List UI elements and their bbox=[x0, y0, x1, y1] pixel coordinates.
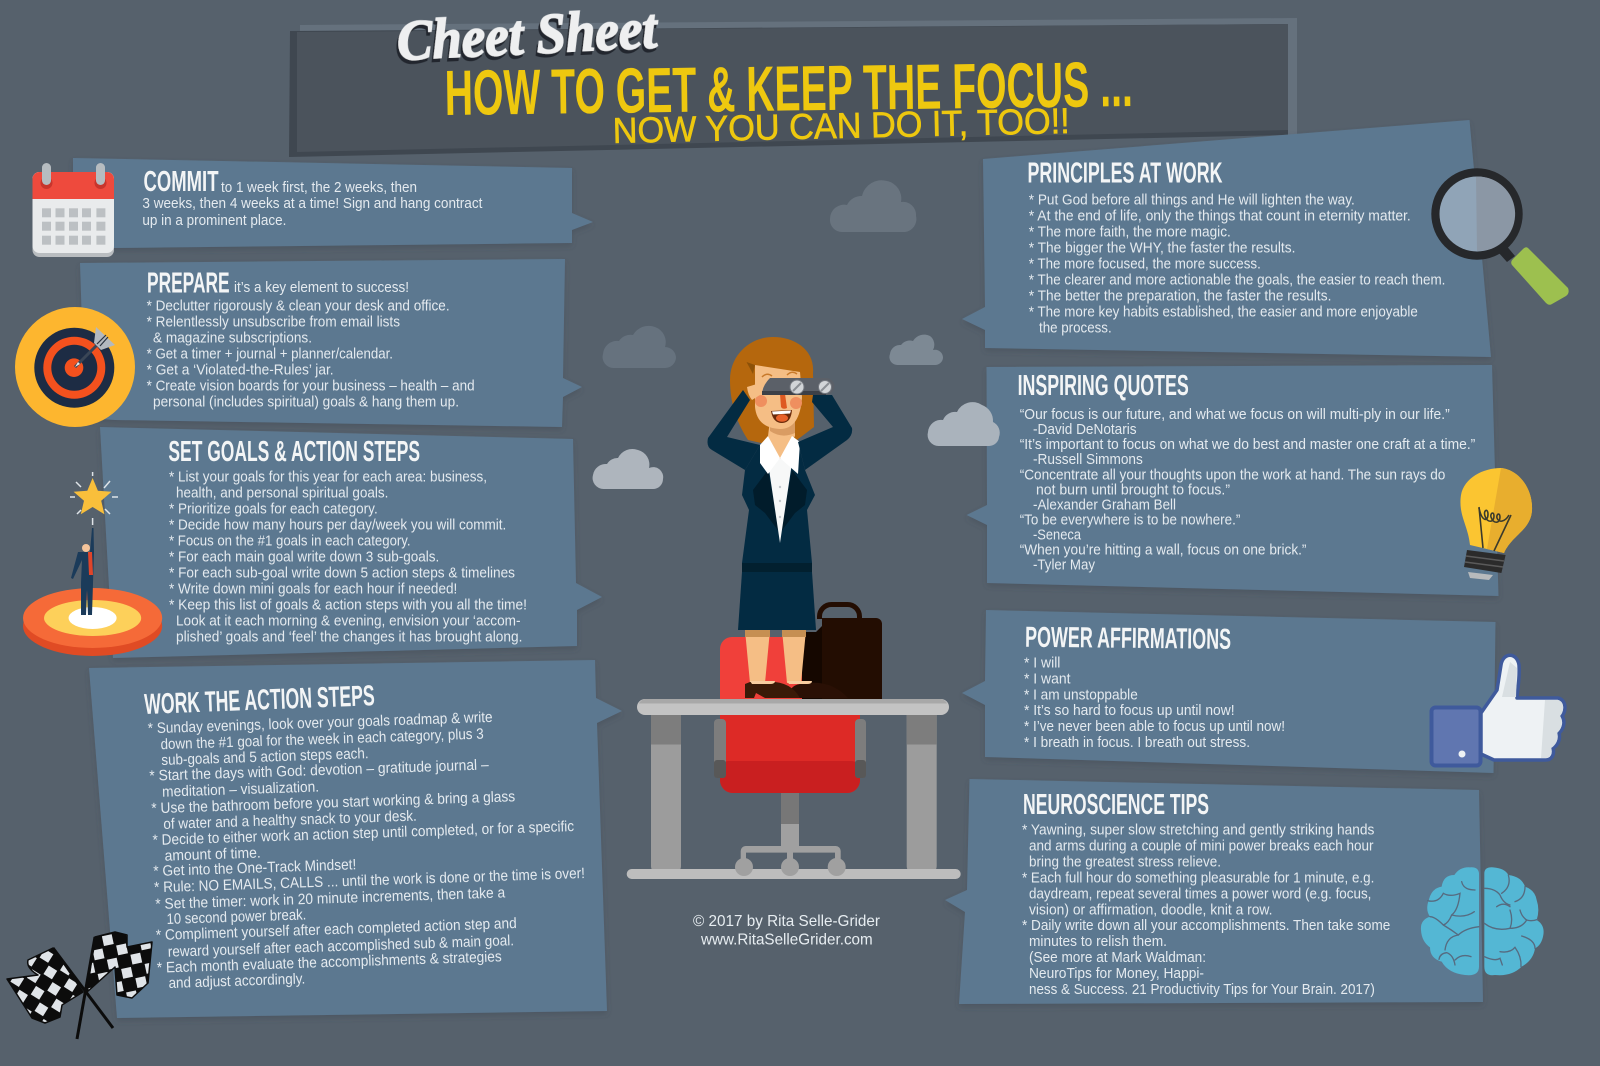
text: set goals: * For each main goal write down 3 sub-goals. bbox=[169, 549, 439, 566]
text: affirmations bbox=[1024, 655, 1285, 751]
text: work: amount of time. bbox=[164, 845, 261, 865]
panel: commit bbox=[73, 158, 593, 248]
hand bbox=[747, 380, 770, 400]
heading: affirmations: POWER AFFIRMATIONS bbox=[1025, 622, 1231, 656]
text: quotes: “It’s important to focus on what we do best and master one craft at a time.” bbox=[1020, 436, 1475, 453]
text: affirmations: * I will bbox=[1024, 655, 1060, 672]
cheeks, nose, eyes, mouth bbox=[755, 372, 802, 423]
icon: thumbs up bbox=[1432, 655, 1565, 766]
text: principles: * The clearer and more actionable the goals, the easier to reach them. bbox=[1029, 271, 1445, 288]
text: principles: * The more faith, the more magic. bbox=[1029, 223, 1231, 240]
text: work bbox=[147, 709, 585, 992]
lapels bbox=[753, 470, 780, 533]
panel shape: quotes bbox=[967, 365, 1498, 596]
panel: principles at work bbox=[962, 120, 1491, 357]
panel shape: work bbox=[89, 660, 622, 1018]
text: principles: * The more key habits established, the easier and more enjoyable bbox=[1029, 303, 1418, 320]
text: quotes: -Alexander Graham Bell bbox=[1033, 496, 1176, 513]
panel shape: principles bbox=[962, 120, 1491, 357]
text: principles bbox=[1029, 191, 1445, 336]
icon: brain bbox=[1421, 867, 1544, 975]
icon: man reaching for star on platform bbox=[23, 472, 162, 656]
text: affirmations: * I am unstoppable bbox=[1024, 686, 1138, 703]
text: work: * Each month evaluate the accomplishments & strategies bbox=[157, 948, 502, 977]
text: quotes: -Tyler May bbox=[1033, 556, 1095, 573]
text: affirmations: * It’s so hard to focus up until now! bbox=[1024, 702, 1235, 719]
text: set goals: * For each sub-goal write down 5 action steps & timelines bbox=[169, 565, 515, 582]
panel: work the action steps bbox=[89, 660, 622, 1018]
text: principles: * The bigger the WHY, the faster the results. bbox=[1029, 239, 1295, 256]
arms bbox=[708, 390, 852, 470]
text: prepare: * Get a ‘Violated-the-Rules’ jar. bbox=[147, 361, 334, 378]
panel: power affirmations bbox=[962, 610, 1496, 773]
text: quotes: “Our focus is our future, and what we focus on will multi-ply in our life.” bbox=[1020, 406, 1450, 423]
face bbox=[755, 365, 802, 429]
icon: light bulb bbox=[1460, 468, 1532, 580]
heading: neuroscience: NEUROSCIENCE TIPS bbox=[1023, 789, 1209, 821]
briefcase bbox=[802, 604, 882, 699]
chair base bbox=[735, 846, 846, 876]
copyright credit: © 2017 by Rita Selle-Grider bbox=[693, 913, 881, 930]
text: set goals: Look at it each morning & evening, envision your ‘accom- bbox=[176, 613, 521, 630]
heading: commit: COMMIT bbox=[144, 166, 219, 198]
heading: work: WORK THE ACTION STEPS bbox=[144, 680, 375, 721]
text: quotes: not burn until brought to focus.” bbox=[1036, 481, 1230, 498]
jacket bbox=[742, 442, 815, 563]
text: affirmations: * I’ve never been able to focus up until now! bbox=[1024, 718, 1285, 735]
text: neuroscience: (See more at Mark Waldman: bbox=[1029, 949, 1206, 966]
text: prepare: * Get a timer + journal + planner/calendar. bbox=[147, 345, 393, 362]
text: prepare: * Relentlessly unsubscribe from email lists bbox=[147, 314, 400, 331]
text: work: * Compliment yourself after each completed action step and bbox=[156, 915, 517, 944]
subtitle: NOW YOU CAN DO IT, TOO!! bbox=[612, 100, 1070, 151]
text: neuroscience: minutes to relish them. bbox=[1029, 933, 1167, 950]
text: quotes: -Seneca bbox=[1033, 526, 1082, 543]
text: neuroscience: daydream, repeat several times a power word (e.g. focus, bbox=[1029, 885, 1371, 902]
cloud: lower left bbox=[593, 449, 663, 489]
panel shape: set goals bbox=[100, 427, 602, 658]
panel: neuroscience tips bbox=[945, 779, 1483, 1004]
panel: prepare bbox=[80, 259, 582, 427]
desk top bbox=[637, 699, 949, 715]
collar bbox=[760, 436, 800, 474]
text: commit: 3 weeks, then 4 weeks at a time! Sign and hang contract bbox=[142, 195, 483, 212]
hair bbox=[730, 337, 814, 445]
legs bbox=[745, 630, 770, 683]
icon: checkered flags bbox=[7, 932, 152, 1039]
text: quotes bbox=[1020, 406, 1475, 573]
text: neuroscience: vision) or affirmation, doodle, knit a row. bbox=[1029, 901, 1272, 918]
header banner bbox=[289, 0, 1297, 157]
text: work: * Rule: NO EMAILS, CALLS ... until the work is done or the time is over! bbox=[154, 865, 585, 896]
text: neuroscience: bring the greatest stress relieve. bbox=[1029, 853, 1221, 870]
chair back bbox=[720, 637, 860, 699]
text: set goals: plished’ goals and ‘feel’ the changes it has brought along. bbox=[176, 629, 522, 646]
text: work: 10 second power break. bbox=[166, 906, 307, 928]
text: quotes: “When you’re hitting a wall, focus on one brick.” bbox=[1020, 541, 1306, 558]
text: work: * Sunday evenings, look over your goals roadmap & write bbox=[147, 709, 493, 737]
icon: calendar bbox=[32, 163, 114, 257]
text: prepare: & magazine subscriptions. bbox=[153, 330, 312, 347]
text: principles: * The more focused, the more success. bbox=[1029, 255, 1261, 272]
text: neuroscience: and arms during a couple of mini power breaks each hour bbox=[1029, 837, 1374, 854]
text: neuroscience: NeuroTips for Money, Happi- bbox=[1029, 965, 1204, 982]
text: principles: * The better the preparation, the faster the results. bbox=[1029, 287, 1331, 304]
binoculars bbox=[762, 378, 834, 395]
text: set goals: * Write down mini goals for each hour if needed! bbox=[169, 581, 457, 598]
neck bbox=[768, 420, 795, 459]
panel: inspiring quotes bbox=[967, 365, 1498, 596]
woman bbox=[708, 337, 852, 698]
text: commit: up in a prominent place. bbox=[142, 212, 286, 229]
illustration: woman on desk with chair and briefcase bbox=[627, 337, 961, 879]
text: work: meditation – visualization. bbox=[162, 779, 319, 801]
text: work: sub-goals and 5 action steps each. bbox=[161, 745, 369, 769]
heading: set goals: SET GOALS & ACTION STEPS bbox=[168, 436, 420, 468]
cloud: top bbox=[830, 180, 916, 232]
text: set goals: * Decide how many hours per day/week you will commit. bbox=[169, 517, 506, 534]
floor bar bbox=[627, 869, 961, 879]
text: prepare: * Create vision boards for your business – health – and bbox=[147, 378, 475, 395]
text: work: * Decide to either work an action step until completed, or for a specific bbox=[152, 818, 575, 849]
text: prepare: personal (includes spiritual) goals & hang them up. bbox=[153, 394, 459, 411]
chair lower body bbox=[714, 715, 866, 846]
text: quotes: -Russell Simmons bbox=[1033, 451, 1143, 468]
text: quotes: “Concentrate all your thoughts upon the work at hand. The sun rays do bbox=[1020, 466, 1445, 483]
text: work: of water and a healthy snack to your desk. bbox=[163, 808, 417, 833]
text: set goals: health, and personal spiritual goals. bbox=[176, 485, 388, 502]
copyright credit bbox=[693, 913, 881, 948]
text: set goals bbox=[169, 469, 527, 646]
neck shadow bbox=[770, 420, 795, 436]
panel shape: neuroscience bbox=[945, 779, 1483, 1004]
cloud: upper left bbox=[603, 326, 676, 368]
text: affirmations: * I breath in focus. I breath out stress. bbox=[1024, 734, 1250, 751]
text: neuroscience: * Daily write down all your accomplishments. Then take some bbox=[1022, 917, 1390, 934]
text: principles: * Put God before all things and He will lighten the way. bbox=[1029, 191, 1355, 208]
icon: magnifying glass bbox=[1431, 168, 1569, 305]
desk legs bbox=[651, 715, 937, 874]
text: work: * Set the timer: work in 20 minute increments, then take a bbox=[155, 884, 506, 913]
shoes bbox=[790, 683, 848, 698]
text: work: and adjust accordingly. bbox=[168, 970, 305, 992]
text: set goals: * Focus on the #1 goals in each category. bbox=[169, 533, 411, 550]
text: work: * Start the days with God: devotion – gratitude journal – bbox=[149, 756, 490, 785]
text: neuroscience bbox=[1022, 821, 1390, 998]
text: commit bbox=[142, 179, 483, 229]
text: commit: to 1 week first, the 2 weeks, then bbox=[221, 179, 417, 196]
text: principles: the process. bbox=[1039, 319, 1112, 336]
shirt bbox=[767, 456, 793, 543]
text: neuroscience: ness & Success. 21 Productivity Tips for Your Brain. 2017) bbox=[1029, 981, 1375, 998]
text: neuroscience: * Yawning, super slow stretching and gently striking hands bbox=[1022, 821, 1374, 838]
panel shape: affirmations bbox=[962, 610, 1496, 773]
hair shade bbox=[746, 362, 755, 374]
text: neuroscience: * Each full hour do something pleasurable for 1 minute, e.g. bbox=[1022, 869, 1374, 886]
text: quotes: “To be everywhere is to be nowhere.” bbox=[1020, 511, 1240, 528]
title: main headline: HOW TO GET & KEEP THE FOCUS ... bbox=[444, 48, 1133, 129]
heading: prepare: PREPARE bbox=[147, 268, 230, 300]
heading: quotes: INSPIRING QUOTES bbox=[1018, 370, 1189, 402]
text: prepare: it’s a key element to success! bbox=[234, 279, 409, 296]
text: work: down the #1 goal for the week in each category, plus 3 bbox=[160, 726, 484, 753]
heading: principles: PRINCIPLES AT WORK bbox=[1028, 158, 1223, 190]
cloud: upper right bbox=[889, 335, 943, 365]
icon: target with arrow bbox=[15, 307, 135, 427]
text: principles: * At the end of life, only the things that count in eternity matter. bbox=[1029, 207, 1411, 224]
waistband bbox=[742, 563, 812, 572]
cloud: right, overlapping the quotes panel bbox=[928, 402, 1000, 446]
copyright credit: www.RitaSelleGrider.com bbox=[700, 932, 873, 948]
text: set goals: * Prioritize goals for each category. bbox=[169, 501, 378, 518]
panel shape: commit bbox=[73, 158, 593, 248]
text: work: * Get into the One-Track Mindset! bbox=[153, 856, 357, 880]
text: work: reward yourself after each accomplished sub & main goal. bbox=[168, 932, 514, 961]
panel shape: prepare bbox=[80, 259, 582, 427]
skirt bbox=[738, 572, 816, 630]
text: affirmations: * I want bbox=[1024, 670, 1071, 687]
text: prepare: * Declutter rigorously & clean your desk and office. bbox=[147, 298, 450, 315]
panel: set goals bbox=[100, 427, 602, 658]
text: prepare bbox=[147, 279, 475, 411]
text: quotes: -David DeNotaris bbox=[1033, 421, 1137, 438]
text: work: * Use the bathroom before you start working & bring a glass bbox=[151, 788, 515, 817]
text: set goals: * Keep this list of goals & action steps with you all the time! bbox=[169, 597, 527, 614]
text: set goals: * List your goals for this year for each area: business, bbox=[169, 469, 487, 486]
